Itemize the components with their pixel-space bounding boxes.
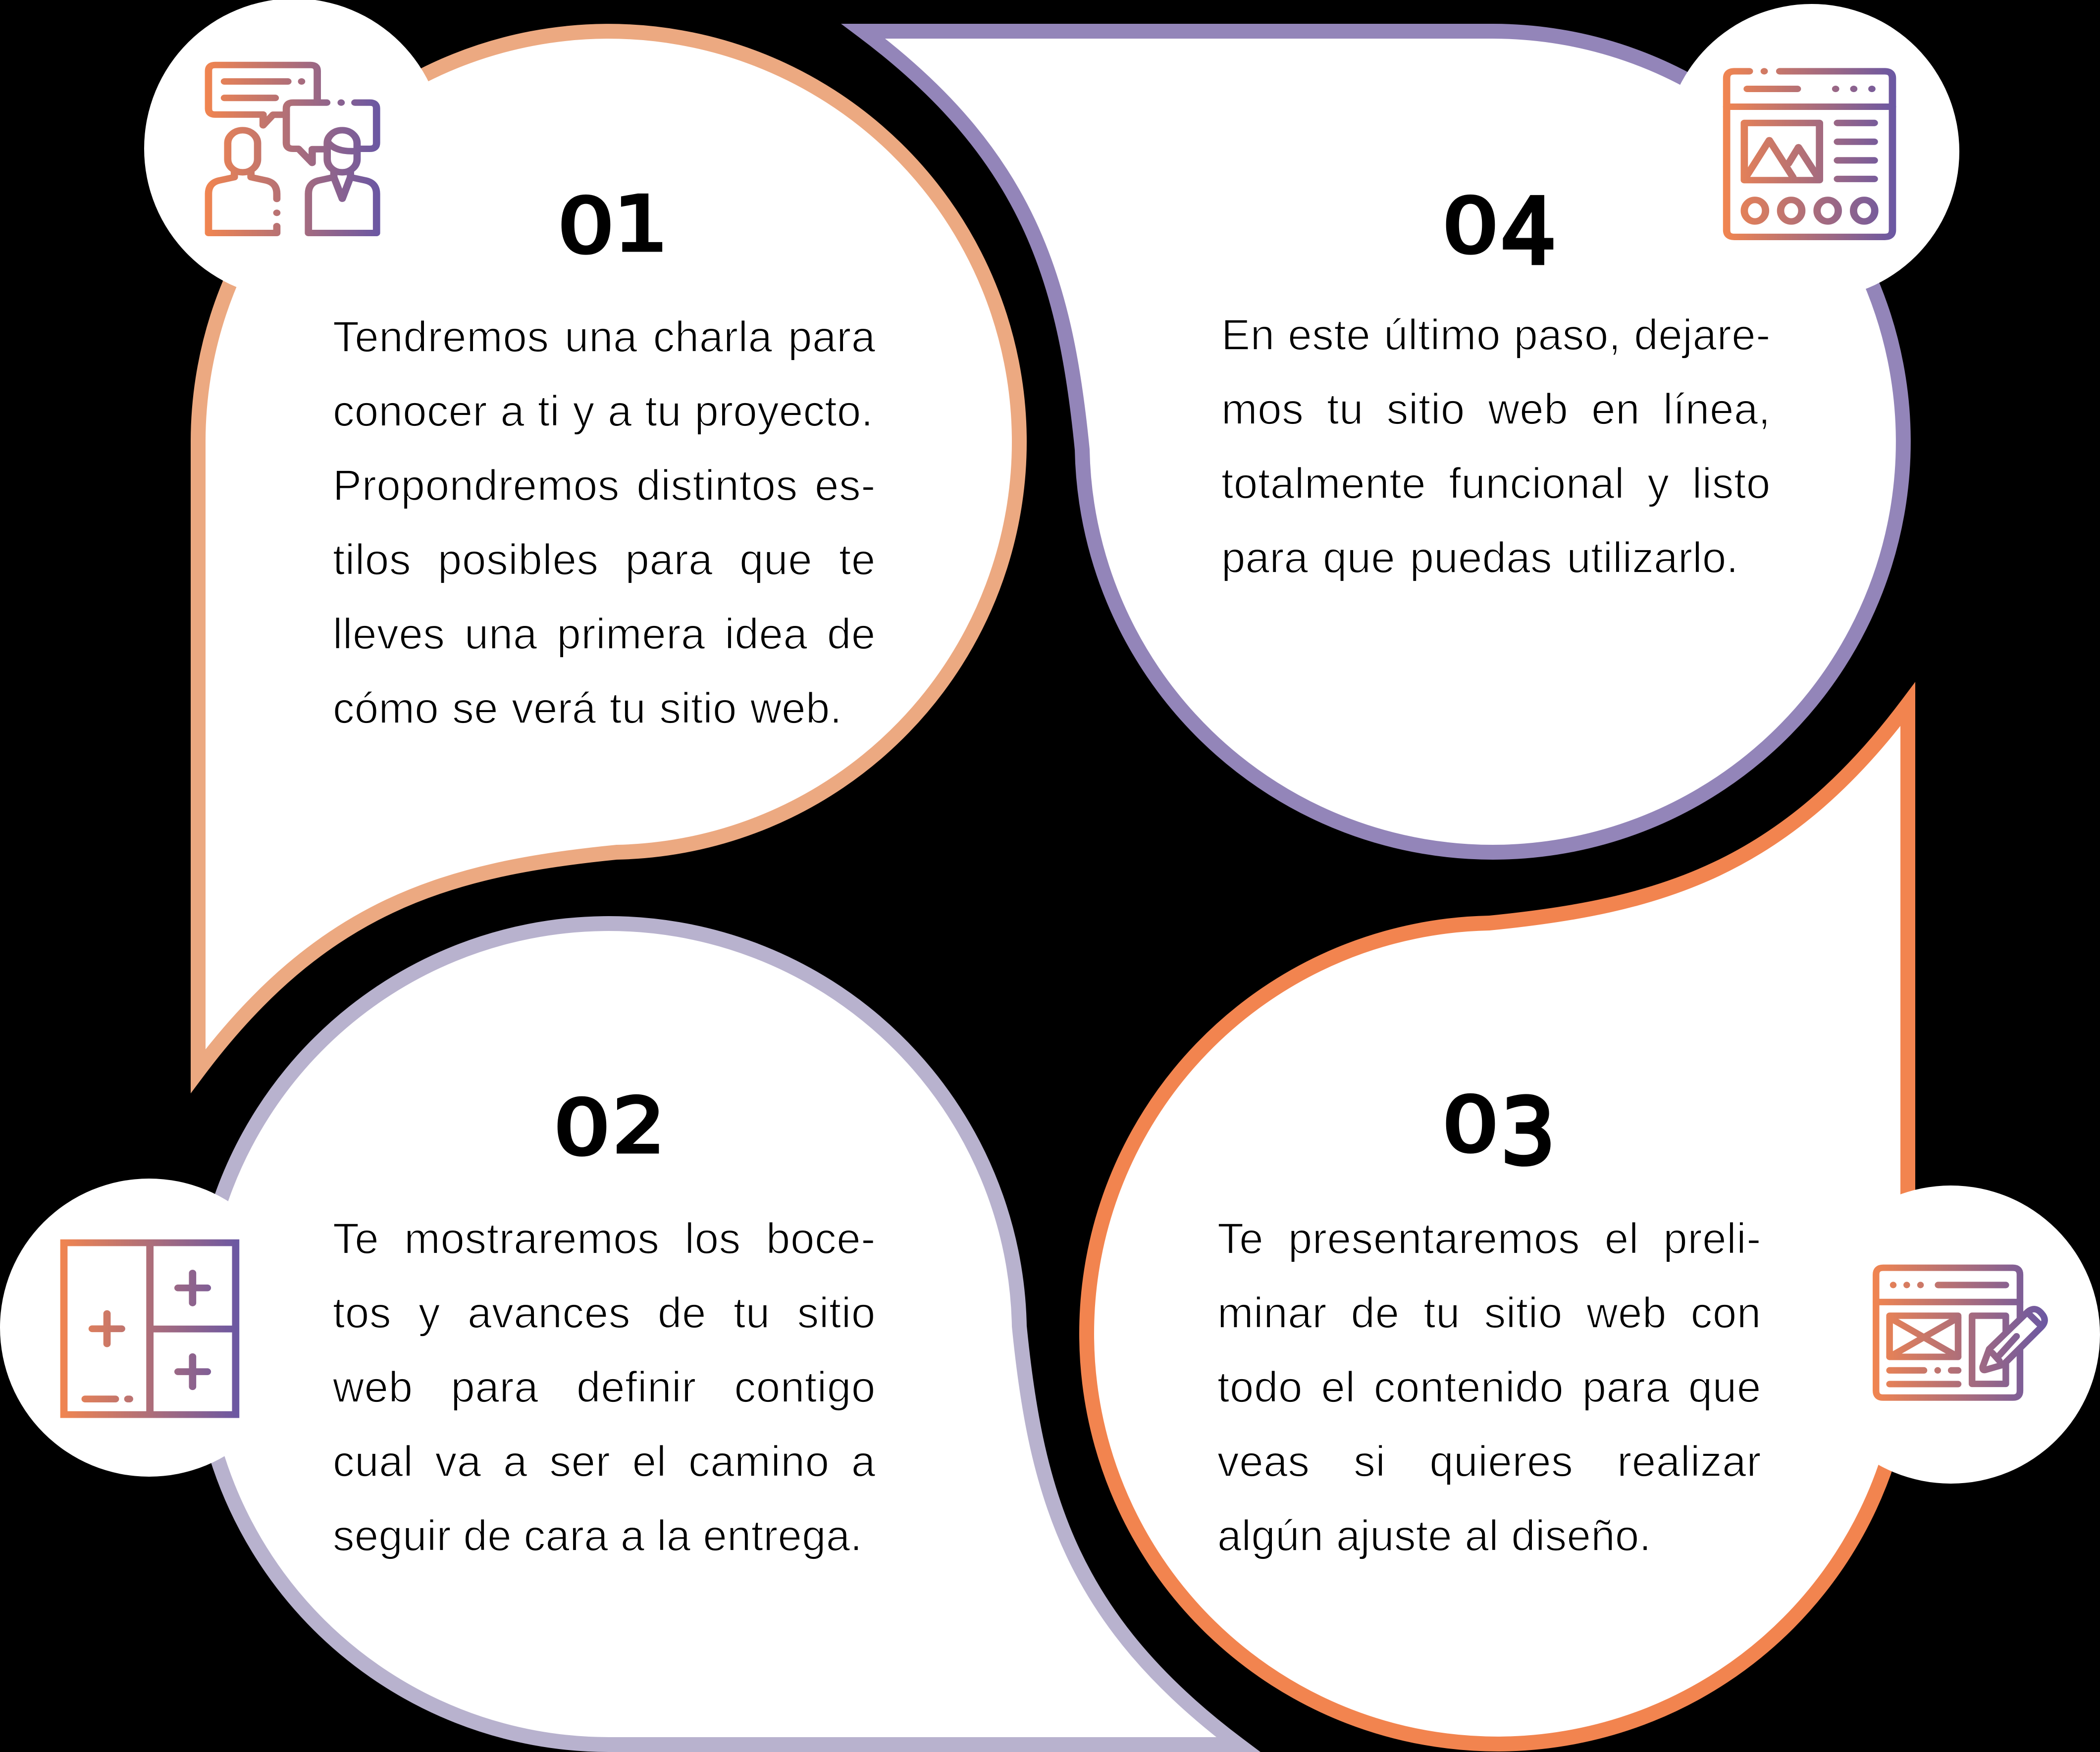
number 03: 3 (1500, 1080, 1556, 1185)
number 01: 1 (614, 181, 668, 268)
text block: step 01: tilos posibles para que te (333, 536, 876, 584)
text block: step 01: Tendremos una charla para (333, 313, 876, 361)
text block: step 02: Te mostraremos los boce- (333, 1215, 876, 1263)
text block: step 04: para que puedas utilizarlo. (1221, 534, 1738, 582)
text block: step 02: web para definir contigo (333, 1363, 876, 1411)
text block: step 03: veas si quieres realizar (1217, 1438, 1761, 1486)
number 03 (1442, 1080, 1556, 1185)
text block: step 02: cual va a ser el camino a (333, 1438, 876, 1486)
number 04: 0 (1442, 183, 1499, 270)
text block: step 03: minar de tu sitio web con (1217, 1289, 1761, 1337)
text block: step 03: Te presentaremos el preli- (1217, 1215, 1761, 1263)
panel 2 outline (198, 924, 1238, 1745)
number 04: 4 (1501, 179, 1556, 285)
text block: step 03: todo el contenido para que (1217, 1363, 1761, 1411)
text block: step 04 (1221, 311, 1771, 582)
icon circle 4 (1664, 4, 1959, 299)
icon: wireframe with pencil (1876, 1268, 2045, 1397)
panel 4 outline (863, 31, 1903, 852)
number 02 (554, 1082, 665, 1172)
icon: web page layout (1727, 71, 1892, 237)
panel 1 outline (198, 31, 1019, 1071)
text block: step 03 (1217, 1215, 1761, 1560)
icon circle 2 (0, 1179, 298, 1477)
number 01 (558, 181, 668, 270)
text block: step 01: lleves una primera idea de (333, 610, 876, 658)
number 02: 0 (554, 1084, 610, 1172)
text block: step 02 (333, 1215, 876, 1560)
icon: grid layout with plus signs (64, 1243, 236, 1415)
number 03: 0 (1442, 1082, 1499, 1169)
icon: two people talking (209, 65, 376, 233)
icon circle 1 (144, 0, 444, 299)
number 02: 2 (613, 1082, 665, 1170)
text block: step 02: seguir de cara a la entrega. (333, 1512, 862, 1560)
text block: step 04: totalmente funcional y listo (1221, 460, 1771, 508)
panel 3 outline (1087, 704, 1908, 1744)
text block: step 04: En este último paso, dejare- (1221, 311, 1771, 359)
text block: step 03: algún ajuste al diseño. (1217, 1512, 1651, 1560)
number 04 (1442, 179, 1556, 285)
text block: step 01: conocer a ti y a tu proyecto. (333, 387, 873, 435)
text block: step 04: mos tu sitio web en línea, (1221, 385, 1771, 433)
text block: step 01 (333, 313, 876, 732)
number 01: 0 (558, 183, 614, 270)
text block: step 02: tos y avances de tu sitio (333, 1289, 876, 1337)
text block: step 01: Propondremos distintos es- (333, 462, 876, 510)
text block: step 01: cómo se verá tu sitio web. (333, 684, 842, 732)
icon circle 3 (1802, 1185, 2100, 1484)
